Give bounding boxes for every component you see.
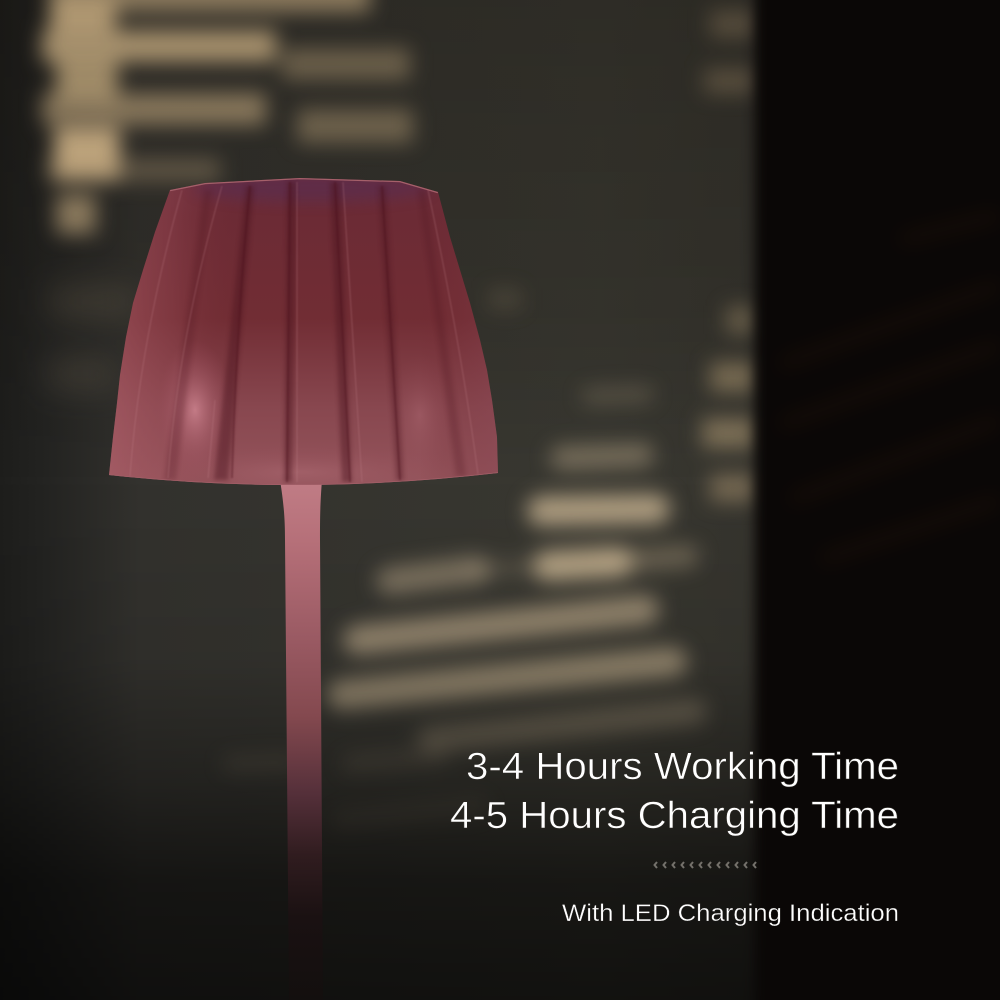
dark pleats bbox=[164, 182, 466, 482]
purple top tint bbox=[201, 180, 420, 200]
narrow dark pleat lines bbox=[232, 182, 400, 482]
caption: LED indication: With LED Charging Indication bbox=[562, 900, 899, 927]
light pleat lines bbox=[130, 182, 478, 482]
text block bbox=[450, 746, 899, 927]
light blobs along the wall edge bbox=[702, 10, 756, 502]
heading: charging time: 4-5 Hours Charging Time bbox=[450, 795, 899, 837]
lamp stem bbox=[280, 480, 323, 1000]
lamp shade bbox=[109, 178, 498, 485]
highlight bbox=[170, 357, 221, 456]
faint bars left side bbox=[48, 288, 135, 388]
light bars upper left bbox=[42, 0, 522, 310]
lamp bbox=[109, 178, 498, 912]
light bars lower centre bbox=[230, 394, 694, 820]
faint diagonal streaks bbox=[780, 215, 1000, 560]
dark right area bbox=[755, 0, 1000, 1000]
chevron divider bbox=[654, 862, 756, 868]
heading: working time: 3-4 Hours Working Time bbox=[466, 746, 899, 788]
bottom rim bbox=[109, 473, 498, 485]
top rim bbox=[170, 178, 438, 192]
